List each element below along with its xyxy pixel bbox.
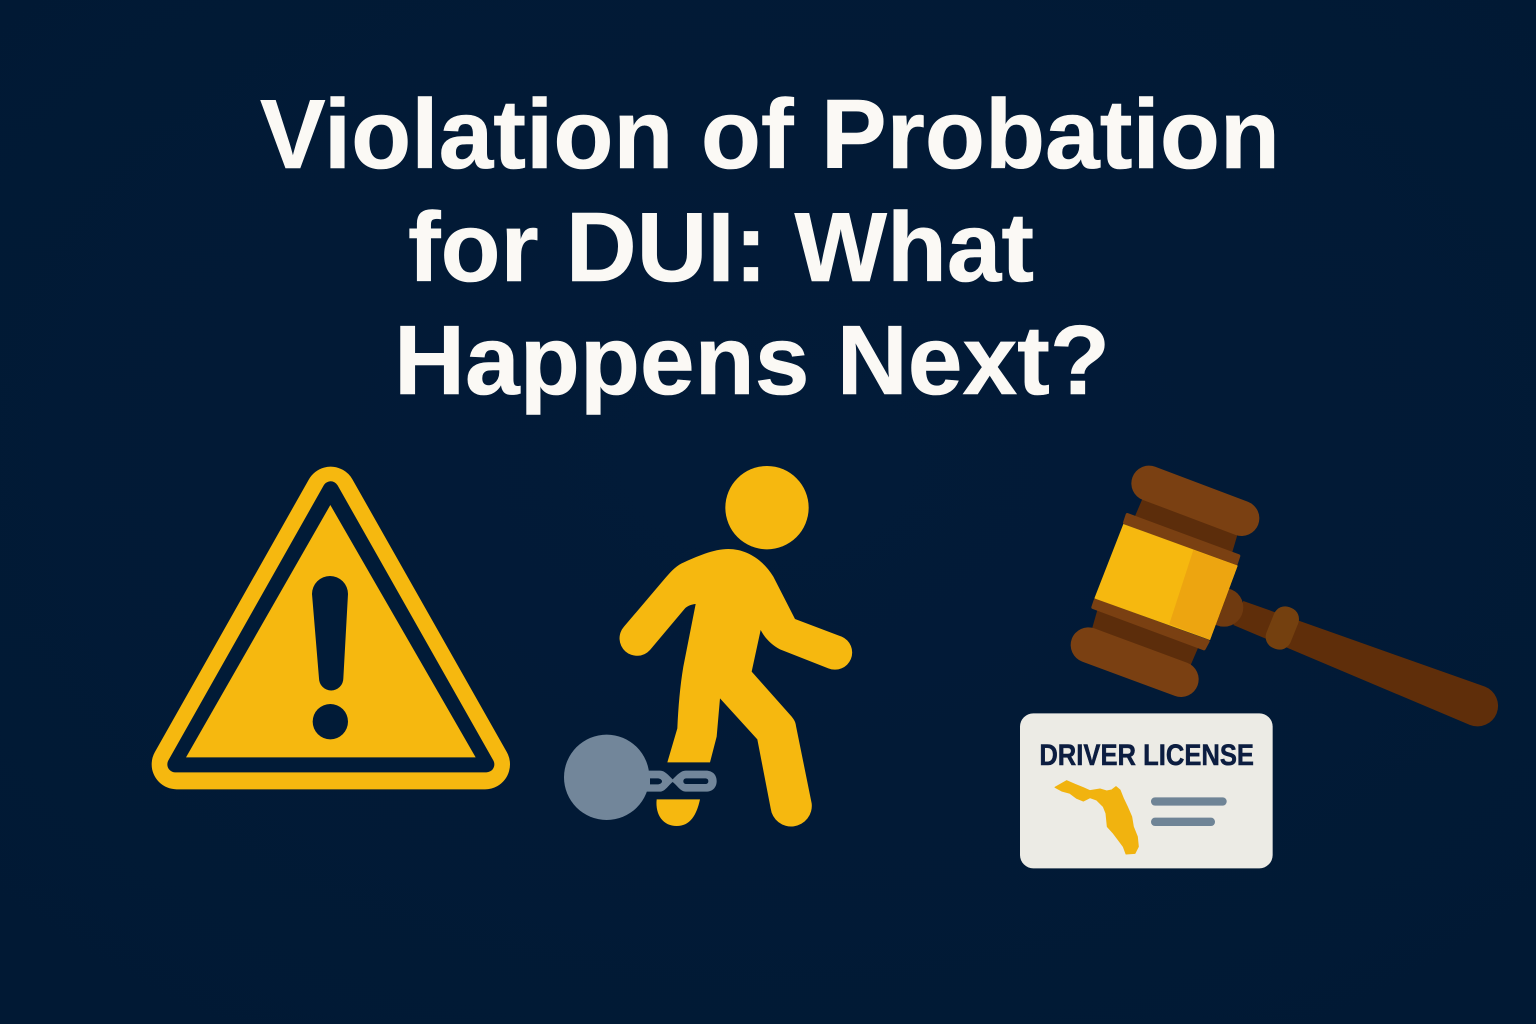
iron ball: [564, 735, 649, 820]
icon: gavel: [1088, 483, 1498, 726]
card text lines: [1151, 797, 1227, 826]
icon: person walking with ball and chain: [564, 466, 852, 826]
title: Violation of Probation: [260, 79, 1280, 189]
person body: [620, 549, 852, 826]
gavel collar: [1205, 588, 1243, 627]
gavel end caps: [1088, 483, 1242, 679]
person foot: [656, 799, 700, 826]
chain: [645, 771, 717, 792]
title: Happens Next?: [394, 305, 1110, 415]
card heading: DRIVER LICENSE: [1039, 739, 1254, 772]
title: for DUI: What: [408, 192, 1034, 302]
person head: [725, 466, 809, 549]
gavel handle ring: [1262, 603, 1303, 653]
icon: warning triangle: [175, 489, 486, 764]
gavel handle: [1233, 601, 1498, 726]
driver license card: [1020, 713, 1273, 868]
gavel bands: [1093, 515, 1239, 649]
title: [260, 79, 1280, 415]
gavel yellow block: [1094, 524, 1238, 640]
gavel head necks: [1092, 497, 1238, 667]
Florida map: [1055, 781, 1138, 854]
